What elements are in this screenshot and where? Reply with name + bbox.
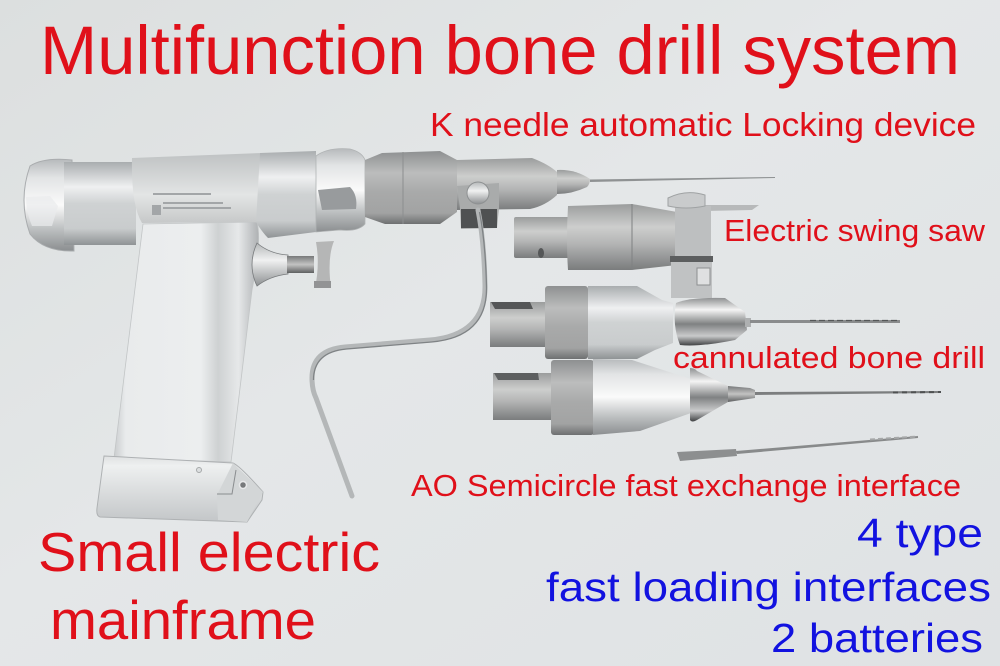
trigger — [252, 241, 334, 288]
label: K needle locking device: K needle automatic Locking device — [430, 106, 976, 143]
rear cylinder — [64, 162, 136, 245]
label: cannulated bone drill: cannulated bone drill — [673, 340, 985, 375]
label: interfaces and batteries — [546, 510, 991, 661]
label: interfaces and batteries: 2 batteries — [771, 615, 983, 661]
AO fast exchange attachment — [493, 359, 941, 435]
locking lever mount — [457, 182, 499, 229]
grey coupling — [365, 151, 457, 224]
centre block — [132, 153, 262, 223]
saw head — [675, 206, 711, 258]
nose tip — [557, 170, 590, 194]
long drill bit — [755, 391, 941, 395]
main drill handpiece — [24, 149, 775, 522]
label: interfaces and batteries: 4 type — [857, 510, 983, 556]
label: small electric mainframe: Small electric — [38, 521, 380, 583]
drill chuck — [675, 298, 747, 345]
label: electric swing saw: Electric swing saw — [724, 213, 986, 248]
front cylinder — [256, 151, 316, 238]
loose drill bit — [677, 436, 918, 461]
front nose section — [457, 158, 557, 210]
label: small electric mainframe: mainframe — [50, 589, 316, 651]
rear end cap — [24, 159, 74, 251]
saw blade — [705, 205, 759, 211]
title: Multifunction bone drill system — [40, 12, 960, 89]
drill bit — [750, 320, 900, 323]
electric swing saw attachment — [514, 193, 759, 298]
engraved label — [152, 193, 231, 215]
cannulated bone drill attachment — [490, 286, 900, 359]
battery base — [97, 456, 263, 522]
K needle — [590, 177, 775, 182]
lever wire — [312, 210, 485, 496]
label: small electric mainframe — [38, 521, 380, 651]
pistol grip handle — [114, 222, 259, 462]
label: AO semicircle interface: AO Semicircle fast exchange interface — [411, 468, 961, 503]
knurled collar — [316, 149, 365, 232]
label: interfaces and batteries: fast loading interfaces — [546, 564, 991, 610]
